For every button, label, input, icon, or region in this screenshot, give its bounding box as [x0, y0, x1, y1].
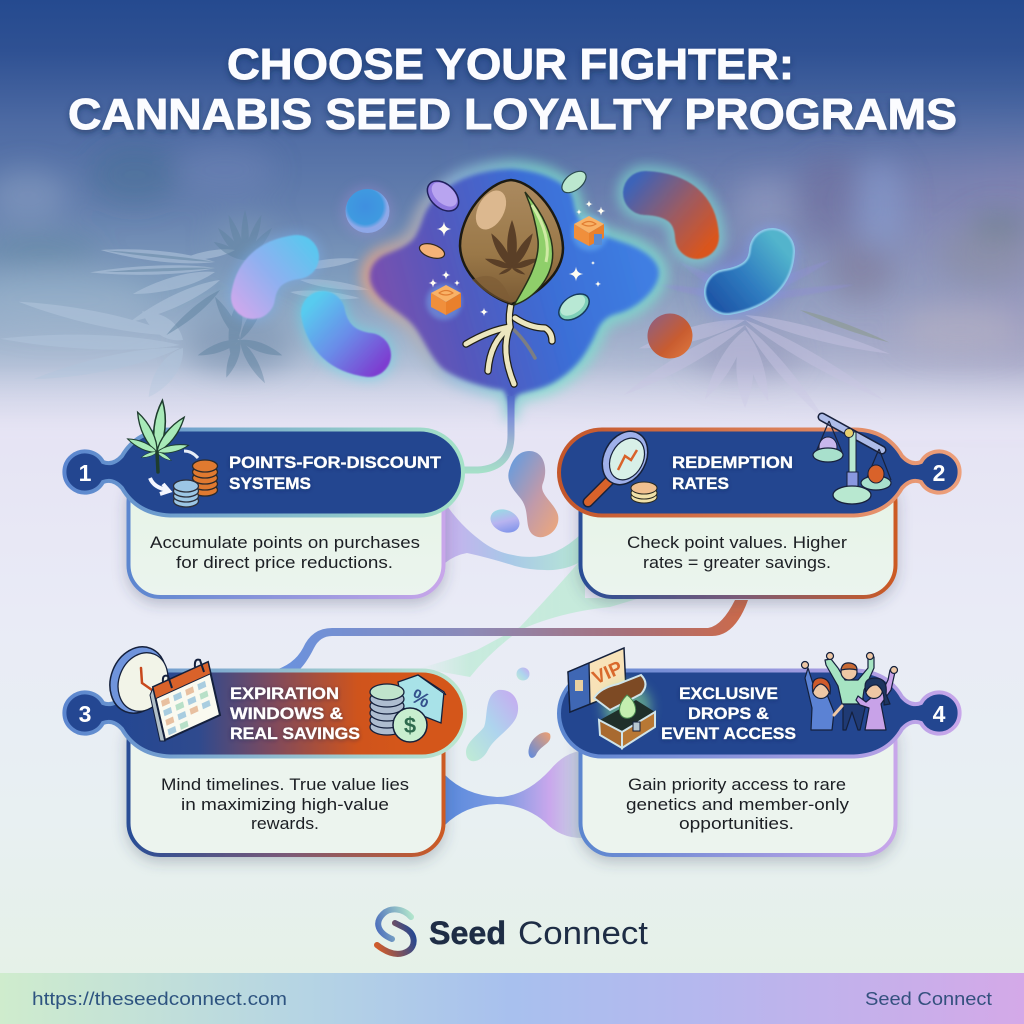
card 3 heading: REAL SAVINGS	[230, 724, 360, 743]
number 2: 2	[933, 460, 945, 486]
card 3 text	[161, 776, 409, 833]
card 4 heading: EVENT ACCESS	[661, 724, 796, 743]
droplet: orange comma	[528, 732, 550, 758]
card 1 heading	[229, 453, 442, 493]
central blob with seed	[367, 166, 662, 470]
card 3 heading	[230, 684, 360, 743]
footer url: https://theseedconnect.com	[32, 989, 287, 1009]
panel: card 3 expiration windows	[64, 638, 465, 855]
person right	[856, 666, 898, 730]
left cannabis plant	[0, 210, 370, 402]
icon: mint coin top	[558, 167, 590, 197]
panel: card 1 points-for-discount	[64, 397, 463, 597]
footer bar	[0, 973, 1024, 1024]
number 4: 4	[933, 701, 946, 727]
droplet: small lilac dot	[516, 668, 530, 680]
panel: card 2 redemption rates	[559, 417, 960, 597]
icon: sparkles	[428, 200, 606, 316]
icon: cheering people	[802, 652, 898, 730]
connector: top flow band between cards 1 and 2	[445, 503, 582, 570]
card 4 header	[559, 670, 960, 756]
logo mark	[377, 909, 414, 954]
icon: purple coin	[422, 175, 464, 217]
icon: VIP card: VIP	[589, 657, 626, 689]
connector: card 2 to card 3	[272, 600, 748, 671]
card 2 body	[580, 470, 896, 597]
title: CHOOSE YOUR FIGHTER:	[227, 40, 794, 89]
card 2 heading: RATES	[672, 474, 729, 493]
card 4 heading: DROPS &	[688, 704, 769, 723]
connector neck to card 1	[463, 396, 511, 470]
card 4 text: genetics and member-only	[626, 796, 850, 814]
footer brand: Seed Connect	[865, 989, 992, 1009]
number 3: 3	[79, 701, 91, 727]
icon: magnifying glass with coins	[588, 423, 657, 503]
card 3 header	[64, 670, 465, 756]
right cannabis plant	[620, 243, 891, 424]
icon: roots	[466, 300, 552, 384]
logo wordmark: Seed	[429, 915, 506, 951]
connector: mint flow band between card 2 and card 3	[420, 555, 640, 677]
card 4 body	[580, 710, 896, 855]
card 2 heading: REDEMPTION	[672, 453, 793, 472]
panel: card 4 exclusive drops	[559, 648, 960, 855]
icon: VIP card	[568, 648, 626, 712]
floating blob: blue-orange bean	[645, 193, 697, 237]
card 1 heading: POINTS-FOR-DISCOUNT	[229, 453, 442, 472]
person left	[802, 662, 842, 730]
icon: savings coins and percent tag: $	[404, 713, 416, 738]
floating blob: orange ball	[648, 314, 692, 358]
icon: balance scale	[813, 417, 891, 504]
card 1 text: for direct price reductions.	[176, 554, 393, 572]
icon: orange coin	[418, 241, 446, 261]
card 4 text	[626, 776, 850, 833]
card 3 text: Mind timelines. True value lies	[161, 776, 409, 794]
card 1 heading: SYSTEMS	[229, 474, 311, 493]
floating blob: lilac bean	[253, 257, 297, 297]
icon: treasure chest	[594, 675, 655, 748]
icon: cannabis leaf with coins	[125, 397, 218, 507]
icon: clock	[100, 638, 176, 722]
floating blob: cyan-violet bean	[323, 313, 369, 355]
card 4 heading	[661, 684, 796, 743]
card 2 text	[627, 534, 848, 572]
card 4 text: Gain priority access to rare	[628, 776, 846, 794]
floating blob: blue ball	[342, 186, 392, 236]
droplet: small oval	[487, 505, 523, 537]
card 4 heading: EXCLUSIVE	[679, 684, 778, 703]
card 2 text: rates = greater savings.	[643, 554, 831, 572]
card 3 heading: WINDOWS &	[230, 704, 343, 723]
card 1 header	[64, 430, 463, 516]
icon: mint coin bottom	[554, 289, 594, 325]
logo wordmark	[429, 915, 648, 951]
title	[68, 40, 957, 139]
card 3 text: rewards.	[251, 815, 319, 833]
logo	[377, 909, 648, 954]
card 1 text	[150, 534, 420, 572]
droplet: lilac-mint	[466, 690, 518, 761]
card 4 text: opportunities.	[679, 815, 794, 833]
card 2 text: Check point values. Higher	[627, 534, 848, 552]
logo wordmark: Connect	[518, 915, 648, 951]
icon: calendar	[150, 660, 220, 741]
title: CANNABIS SEED LOYALTY PROGRAMS	[68, 90, 957, 139]
card 2 header	[559, 430, 960, 516]
card 1 text: Accumulate points on purchases	[150, 534, 420, 552]
number 1: 1	[79, 460, 92, 486]
connector: bottom flow band between cards 3 and 4	[445, 751, 582, 838]
card 2 heading	[672, 453, 793, 493]
card 3 body	[128, 710, 444, 855]
icon: reward box upper	[572, 215, 608, 251]
card 1 body	[128, 470, 444, 597]
card 3 text: in maximizing high-value	[181, 796, 389, 814]
icon: savings coins and percent tag: %	[408, 685, 433, 713]
droplet: blue-orange	[508, 451, 558, 537]
icon: reward box lower	[426, 284, 462, 320]
floating blob: blue bean	[727, 251, 772, 292]
card 3 heading: EXPIRATION	[230, 684, 339, 703]
icon: savings coins and percent tag	[370, 675, 446, 742]
icon: seed	[460, 180, 563, 305]
person centre	[825, 652, 874, 730]
